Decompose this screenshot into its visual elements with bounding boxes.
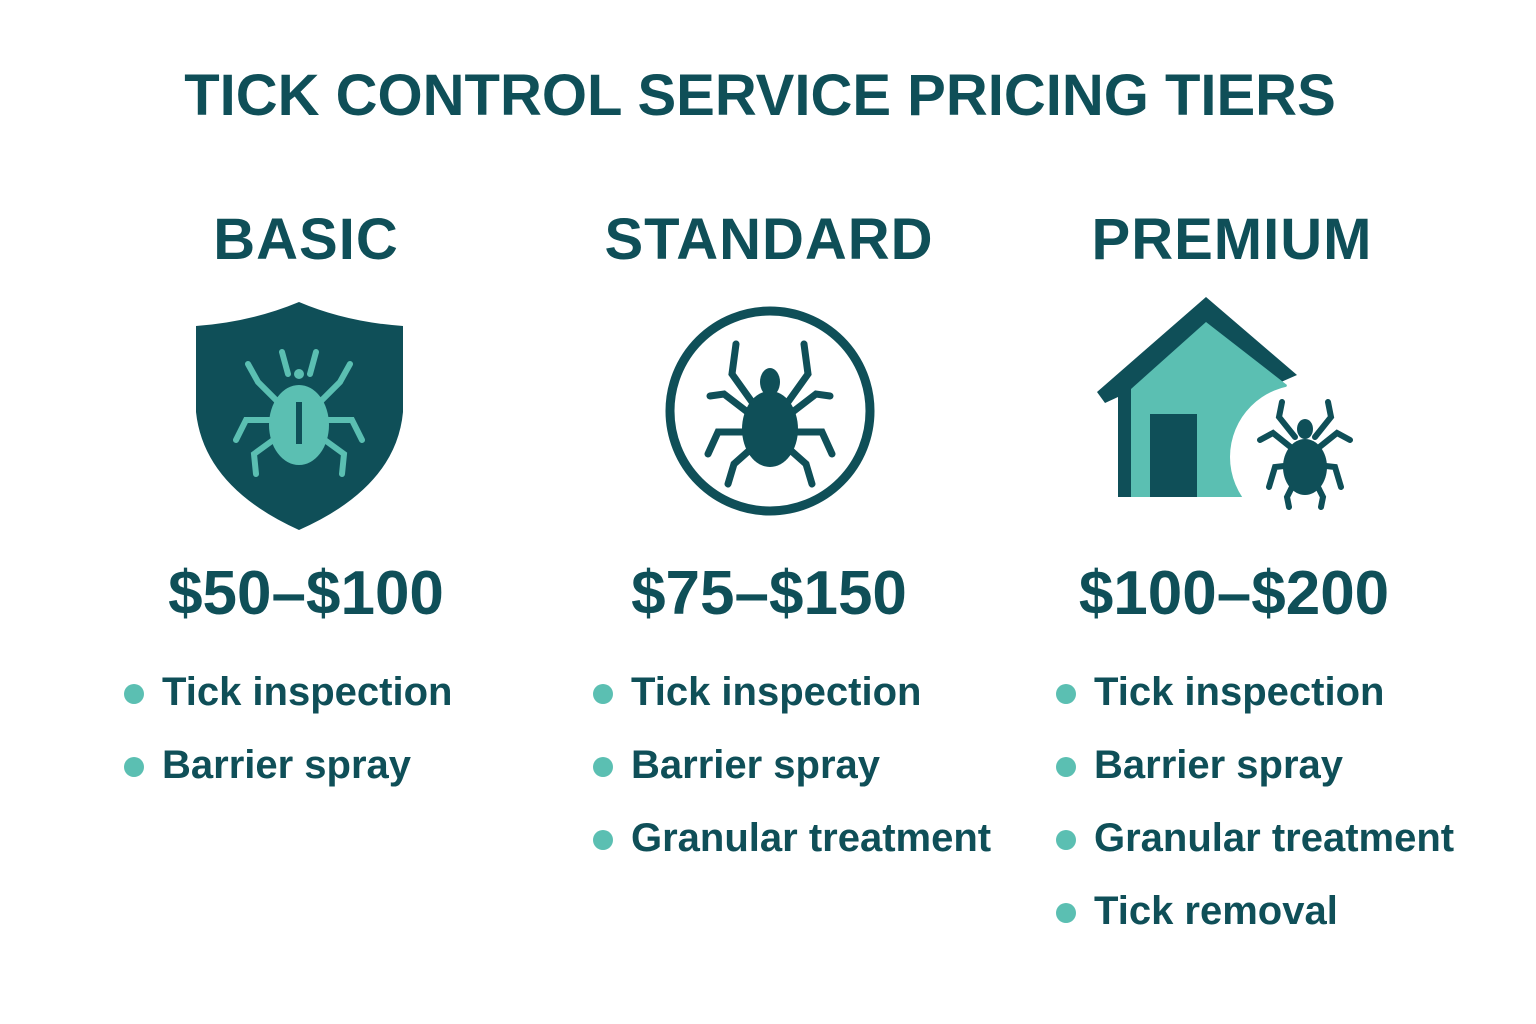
panel: standard: [593, 207, 991, 860]
features: standard: Granular treatment: [631, 816, 991, 860]
icon: tick in circle: [666, 306, 874, 516]
title: TICK CONTROL SERVICE PRICING TIERS: [184, 63, 1336, 128]
panel: basic: [124, 207, 452, 787]
price: premium: $100–$200: [1079, 559, 1389, 628]
features: basic: [124, 670, 452, 787]
price: basic: $50–$100: [168, 559, 444, 628]
heading: standard: STANDARD: [604, 207, 934, 272]
heading: basic: BASIC: [213, 207, 399, 272]
features: basic: Barrier spray: [162, 743, 411, 787]
price: standard: $75–$150: [631, 559, 907, 628]
panel: premium: [1056, 207, 1454, 933]
icon: shield with tick: [196, 302, 403, 530]
features: standard: Tick inspection: [631, 670, 921, 714]
features: standard: [593, 670, 991, 860]
features: premium: [1056, 670, 1454, 933]
features: premium: Barrier spray: [1094, 743, 1343, 787]
features: premium: Tick removal: [1094, 889, 1338, 933]
icon: house with tick: [1097, 297, 1353, 510]
heading: premium: PREMIUM: [1092, 207, 1372, 272]
features: premium: Granular treatment: [1094, 816, 1454, 860]
features: basic: Tick inspection: [162, 670, 452, 714]
features: premium: Tick inspection: [1094, 670, 1384, 714]
features: standard: Barrier spray: [631, 743, 880, 787]
